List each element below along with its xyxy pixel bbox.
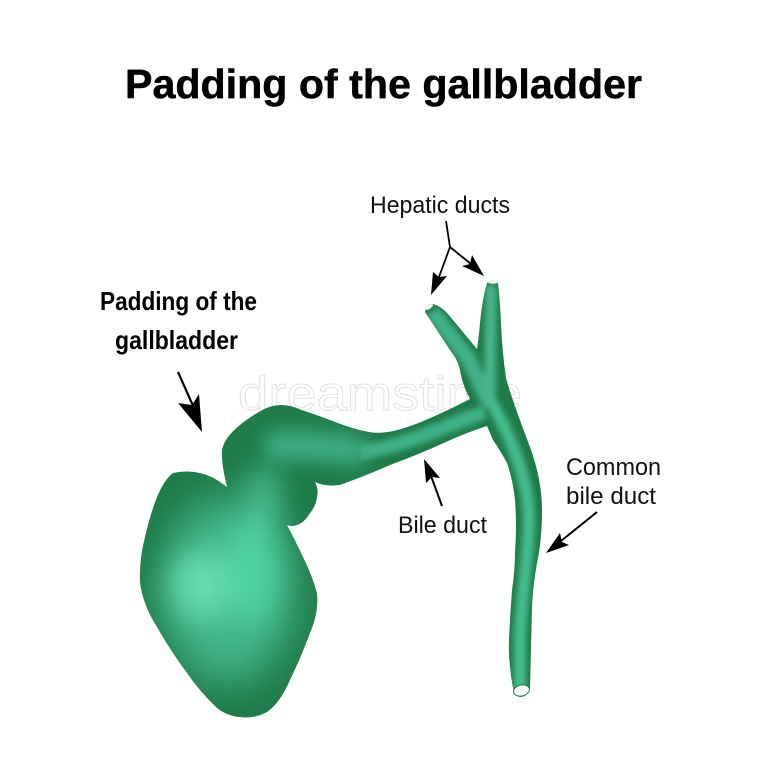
duct end: right hepatic [488, 280, 498, 284]
gallbladder organ body [140, 282, 542, 718]
shading: fundus body [162, 498, 294, 682]
label: common bile duct: Common [566, 454, 661, 481]
arrow: to bile duct [424, 459, 442, 506]
duct end: common bile duct [513, 683, 530, 698]
shading: bile duct [360, 412, 485, 452]
label: padding of the gallbladder: Padding of the [100, 286, 257, 316]
duct end: left hepatic [424, 303, 434, 311]
shading: neck [266, 445, 365, 452]
arrow: to common bile duct [546, 512, 597, 553]
title: Padding of the gallbladder [125, 61, 642, 107]
label: padding of the gallbladder: gallbladder [115, 325, 238, 355]
label: hepatic ducts: Hepatic ducts [370, 192, 510, 219]
label: common bile duct: bile duct [566, 483, 656, 510]
shading: hepatic and common ducts [432, 285, 529, 695]
arrow: to gallbladder [178, 372, 202, 432]
label: bile duct: Bile duct [398, 512, 487, 539]
gallbladder and bile duct illustration [140, 280, 542, 718]
watermark: dreamstime [238, 368, 522, 421]
label: padding of the gallbladder [100, 286, 257, 355]
label: common bile duct [566, 454, 661, 510]
arrows: to hepatic ducts [431, 221, 484, 295]
